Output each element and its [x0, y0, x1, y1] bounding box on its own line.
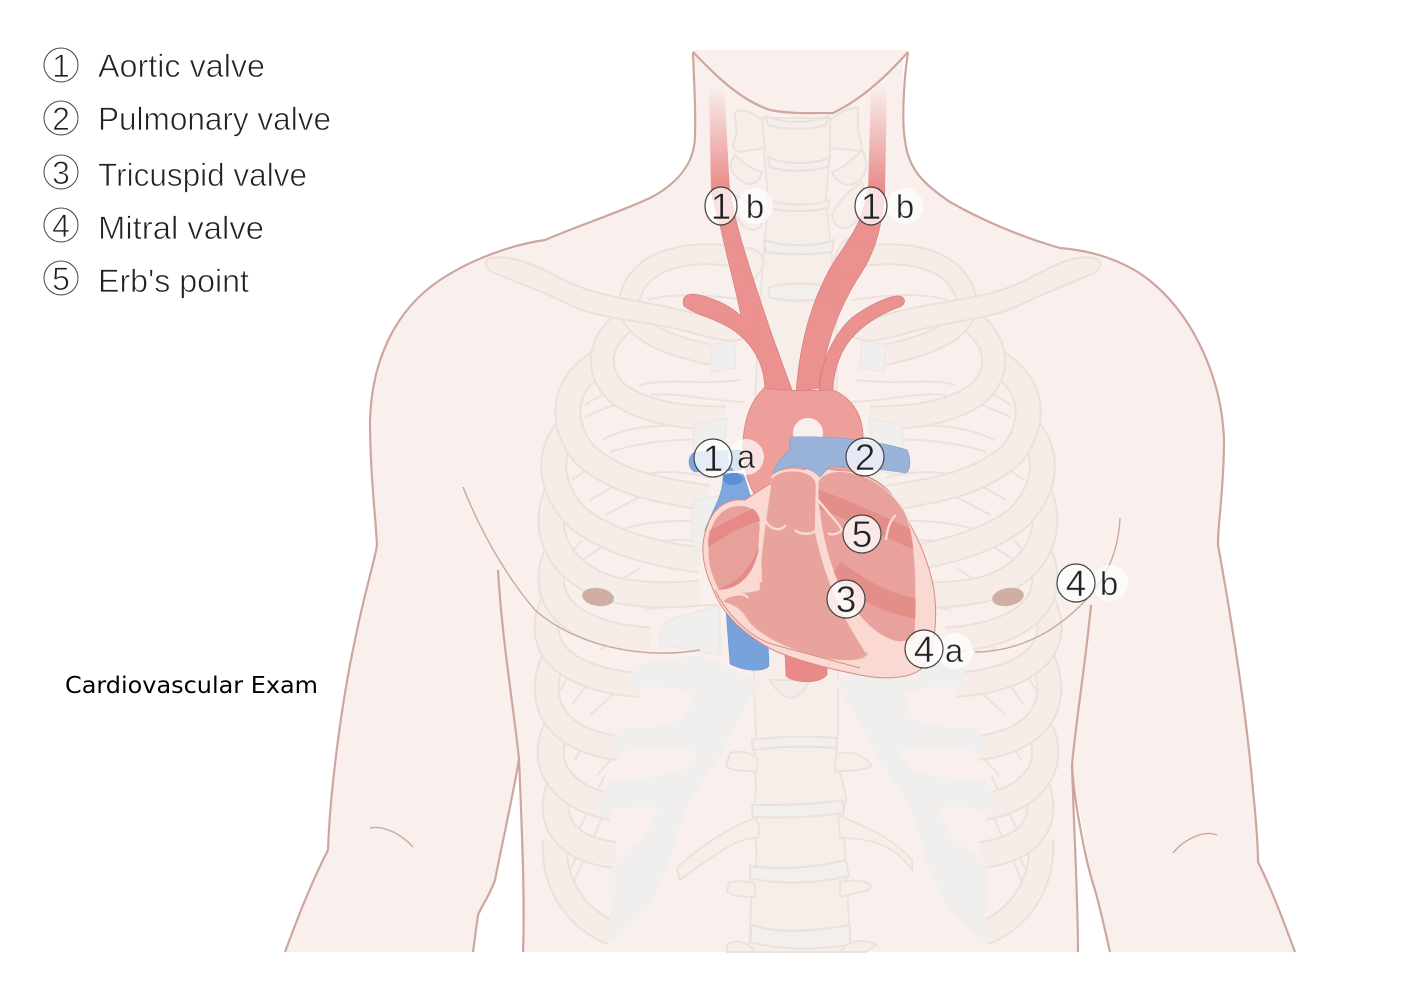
legend item: aortic valve: 1: [52, 48, 70, 84]
marker 1b left: [705, 186, 773, 227]
legend item: tricuspid valve: Tricuspid valve: [98, 157, 307, 193]
pulmonary artery: [773, 437, 910, 477]
skeleton: spine: [749, 116, 850, 952]
spine processes: [677, 108, 912, 952]
marker 3: 3: [836, 579, 856, 620]
marker 4b: [1057, 563, 1128, 604]
marker 4a: [905, 629, 973, 670]
inferior vena cava: [726, 610, 769, 670]
legend item: pulmonary valve: Pulmonary valve: [98, 101, 331, 137]
legend item: mitral valve: 4: [52, 208, 70, 244]
left ventricle shading: [815, 498, 925, 610]
right atrium shading: [708, 508, 760, 590]
right ventricle: [722, 471, 868, 660]
body contour lines: [285, 52, 1295, 952]
right pulmonary branch: [689, 450, 742, 472]
left ventricle: [818, 472, 916, 642]
marker 4b: b: [1100, 565, 1118, 602]
marker 1b right: 1: [861, 186, 881, 227]
aortic arch: [743, 388, 863, 515]
legend item: aortic valve: Aortic valve: [98, 48, 265, 84]
marker 1a: [694, 438, 764, 479]
title: Cardiovascular Exam: [65, 673, 318, 699]
nipple right: [991, 585, 1025, 609]
nipple left: [581, 586, 615, 608]
marker 1a: a: [737, 438, 756, 475]
marker 4b: 4: [1066, 563, 1086, 604]
marker 1b left: b: [746, 188, 764, 225]
legend item: pulmonary valve: 2: [52, 101, 70, 137]
marker 1b right: [855, 186, 923, 227]
legend item: mitral valve: [44, 208, 264, 246]
marker 2: [846, 437, 884, 478]
legend item: Erb's point: Erb's point: [98, 263, 249, 299]
clavicles: [486, 257, 1100, 341]
descending aorta: [785, 655, 827, 682]
rib cage left: [546, 254, 758, 937]
carotid and subclavian arteries: [683, 85, 904, 400]
superior vena cava: [705, 473, 765, 560]
marker 4a: a: [945, 632, 964, 669]
marker 4a: 4: [914, 629, 934, 670]
marker 1a: 1: [703, 438, 723, 479]
marker 5: 5: [852, 514, 872, 555]
legend item: tricuspid valve: 3: [52, 155, 70, 191]
heart body: [703, 468, 936, 678]
rib cage right: [838, 254, 1050, 937]
valve lines: [722, 470, 896, 652]
legend: [44, 48, 331, 299]
body silhouette: [285, 50, 1295, 952]
legend item: Erb's point: [44, 261, 249, 299]
marker 1b left: 1: [711, 186, 731, 227]
right atrium: [707, 505, 761, 590]
marker 2: 2: [855, 437, 875, 478]
marker 1b right: b: [896, 188, 914, 225]
marker 5: [843, 514, 881, 555]
marker 3: [827, 579, 865, 620]
legend item: mitral valve: Mitral valve: [98, 210, 264, 246]
legend item: Erb's point: 5: [52, 261, 70, 297]
heart: [689, 388, 936, 682]
